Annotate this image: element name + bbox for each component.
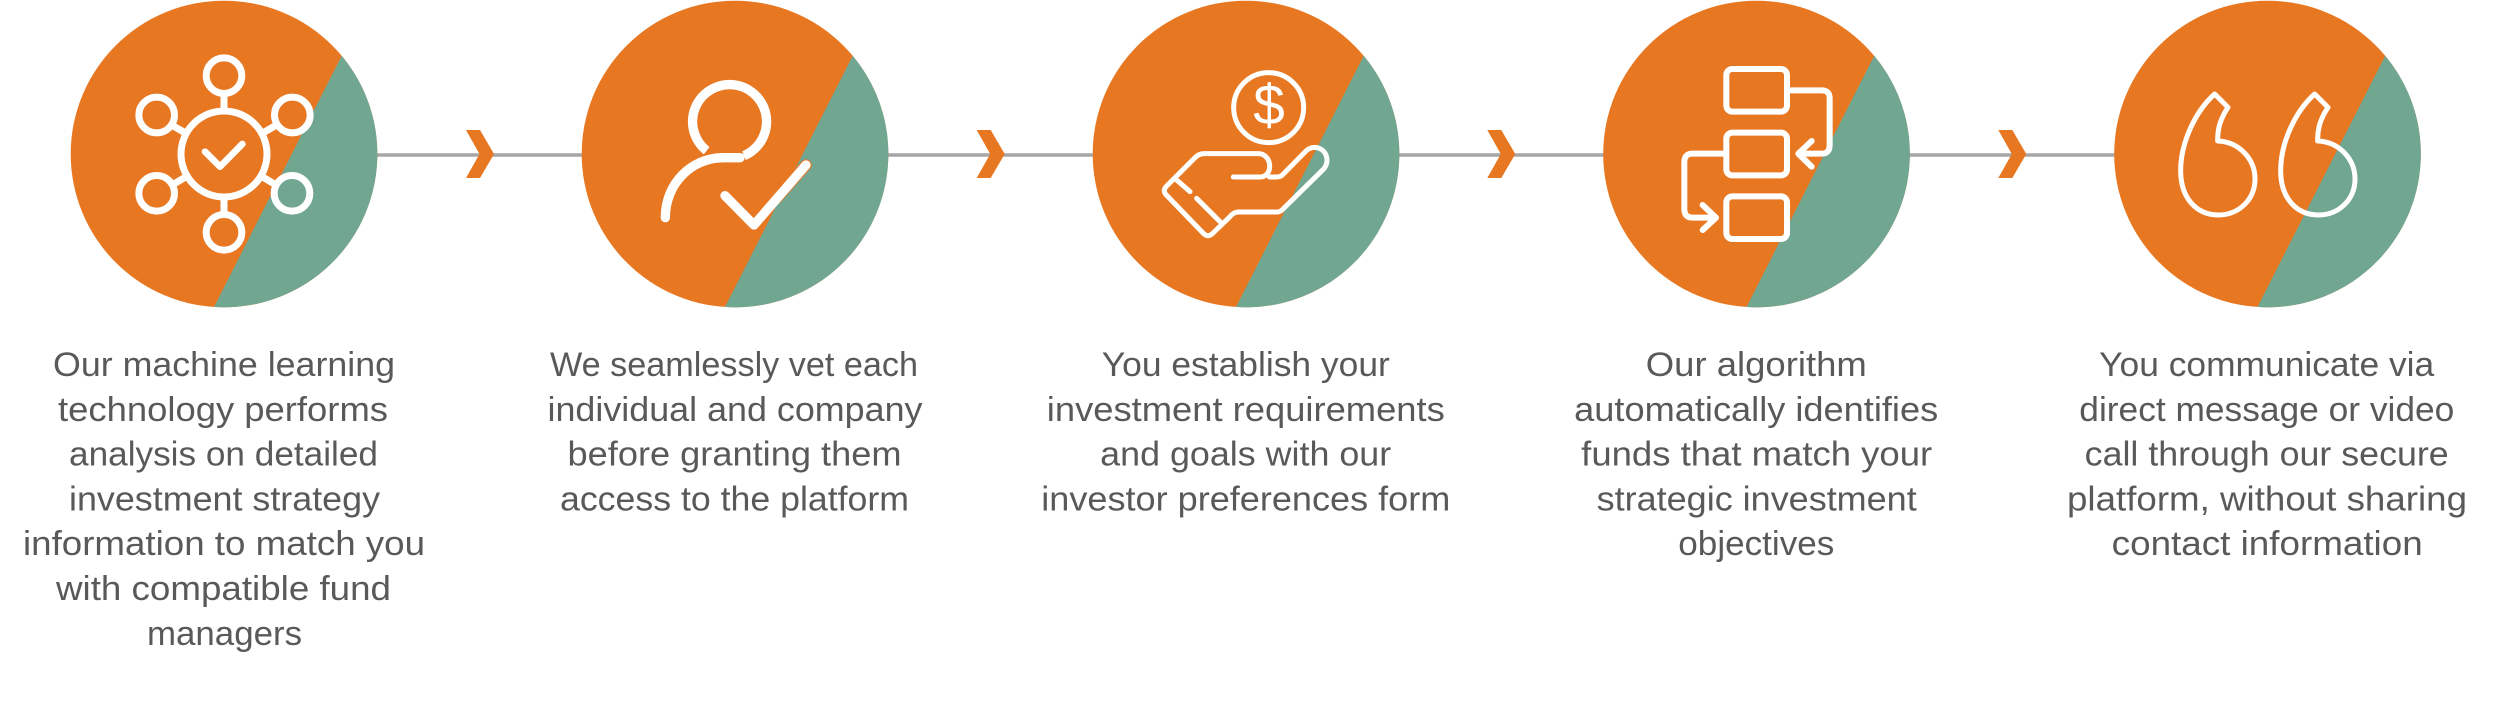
- arrow chevron 1: [466, 130, 494, 178]
- step 2 text: access to the platform: [560, 480, 909, 518]
- step 4 circle: [1603, 1, 1910, 307]
- step 1 text: investment strategy: [69, 480, 381, 518]
- icon: hand holding dollar coin: $: [1253, 74, 1285, 137]
- icon: network hub with check: [139, 58, 310, 250]
- step 1 text: [23, 346, 425, 653]
- step 5 text: contact information: [2112, 525, 2423, 563]
- step 5 text: direct message or video: [2079, 391, 2454, 429]
- step 1 text: with compatible fund: [55, 570, 391, 608]
- step 3 text: You establish your: [1102, 346, 1390, 384]
- step 1 text: managers: [147, 615, 302, 653]
- step 3 text: and goals with our: [1100, 436, 1391, 474]
- step 2 text: before granting them: [568, 436, 902, 474]
- step 3 text: investor preferences form: [1041, 480, 1450, 518]
- step 4 text: strategic investment: [1597, 480, 1917, 518]
- step 5 text: call through our secure: [2085, 436, 2449, 474]
- step 4 text: Our algorithm: [1646, 346, 1867, 384]
- arrow chevron 4: [1998, 130, 2026, 178]
- step 4 text: [1574, 346, 1938, 563]
- icon: quotation marks: [2181, 94, 2355, 215]
- step 2 circle: [582, 1, 888, 307]
- step 3 text: [1041, 346, 1450, 518]
- step 1 text: Our machine learning: [53, 346, 395, 384]
- connector line 2 to 3: [880, 153, 1100, 157]
- step 3 circle: [1093, 1, 1399, 307]
- step 5 circle: [2114, 1, 2421, 307]
- step 3 text: investment requirements: [1047, 391, 1445, 429]
- step 1 text: technology performs: [58, 391, 388, 429]
- step 5 text: You communicate via: [2099, 346, 2435, 384]
- connector line 3 to 4: [1390, 153, 1610, 157]
- step 1 text: analysis on detailed: [69, 436, 378, 474]
- step 2 text: individual and company: [548, 391, 923, 429]
- arrow chevron 2: [977, 130, 1005, 178]
- step 4 text: objectives: [1678, 525, 1834, 563]
- step 2 text: [548, 346, 923, 518]
- icon: hand holding dollar coin: [1164, 73, 1327, 236]
- step 5 text: [2067, 346, 2467, 563]
- step 1 circle: [71, 1, 377, 307]
- step 5 text: platform, without sharing: [2067, 480, 2467, 518]
- step 2 text: We seamlessly vet each: [550, 346, 918, 384]
- connector line 4 to 5: [1900, 153, 2120, 157]
- step 4 text: automatically identifies: [1574, 391, 1938, 429]
- step 1 text: information to match you: [23, 525, 425, 563]
- step 4 text: funds that match your: [1581, 436, 1932, 474]
- connector line 1 to 2: [370, 153, 590, 157]
- arrow chevron 3: [1487, 130, 1515, 178]
- icon: flow chart boxes with arrows: [1684, 69, 1830, 239]
- icon: person with check: [665, 85, 806, 225]
